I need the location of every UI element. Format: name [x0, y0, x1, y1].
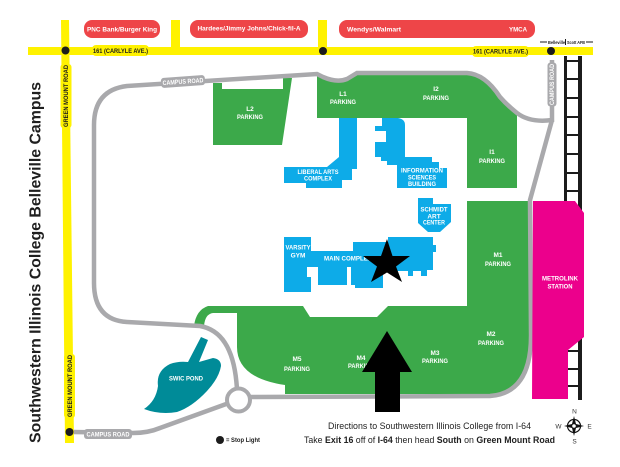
building: Main Complex and Varsity Gym: VARSITY — [286, 244, 311, 252]
business pills — [84, 20, 535, 38]
building: Schmidt Art Center: CENTER — [423, 220, 445, 226]
building: Main Complex and Varsity Gym — [284, 237, 436, 292]
legend: stop light — [216, 436, 260, 444]
icon: star marking location — [363, 239, 410, 282]
label: Carlyle east: 161 (CARLYLE AVE.) — [473, 48, 528, 56]
label: M5: M5 — [292, 356, 302, 363]
label: M1 — [485, 252, 511, 268]
street: Carlyle Ave — [28, 47, 593, 55]
label: L2: PARKING — [237, 114, 263, 121]
label: M3 — [422, 350, 448, 365]
direction marker: Belleville / Scott AFB — [540, 39, 593, 45]
street: Green Mount Road — [61, 20, 74, 443]
road labels — [60, 45, 556, 439]
direction marker: Belleville / Scott AFB: Belleville — [548, 40, 565, 45]
street: connector west — [171, 20, 180, 48]
stop lights — [62, 46, 555, 436]
SWIC pond: SWIC POND — [169, 376, 203, 382]
SWIC pond — [144, 337, 221, 413]
label: I2: I2 — [433, 86, 439, 93]
label: M4 — [348, 355, 374, 370]
campus road — [73, 60, 552, 433]
parking labels — [237, 86, 511, 373]
icon: compass rose: N — [572, 408, 577, 416]
pill: Wendys, Walmart, YMCA: YMCA — [509, 26, 527, 34]
parking: L1, I2, I1 — [317, 73, 517, 188]
pill: Wendys, Walmart, YMCA: Wendys/Walmart — [347, 26, 402, 34]
label: I1: PARKING — [479, 158, 505, 165]
label: L2: L2 — [246, 106, 254, 113]
label: M5: PARKING — [284, 366, 310, 373]
label: M4: M4 — [356, 355, 366, 362]
icon: compass rose — [555, 408, 592, 446]
directions text — [304, 421, 555, 446]
label: Campus Road top — [161, 75, 205, 88]
label: I2: PARKING — [423, 95, 449, 102]
buildings — [284, 118, 451, 292]
pill: Wendys, Walmart, YMCA — [339, 20, 535, 38]
label: I2 — [423, 86, 449, 102]
label: M3: PARKING — [422, 358, 448, 365]
label: Campus Road east — [548, 62, 556, 106]
icon: compass rose: E — [587, 424, 592, 430]
label: L2 — [237, 106, 263, 121]
direction marker: Belleville / Scott AFB: Scott AFB — [567, 40, 586, 45]
metrolink station: METROLINK — [542, 276, 578, 282]
building: Liberal Arts Complex: COMPLEX — [304, 176, 333, 182]
title: Southwestern Illinois College Belleville Campus — [28, 82, 44, 443]
label: Green Mount Road south — [64, 354, 75, 418]
label: M5 — [284, 356, 310, 373]
label: M1: PARKING — [485, 261, 511, 268]
icon: compass rose: W — [555, 424, 562, 430]
label: M4: PARKING — [348, 363, 374, 370]
label: Green Mount Road north: GREEN MOUNT ROAD — [63, 65, 70, 127]
label: Campus Road top: CAMPUS ROAD — [162, 77, 204, 87]
label: Carlyle west — [92, 45, 149, 56]
building: Schmidt Art Center — [418, 198, 451, 232]
legend: stop light: = Stop Light — [226, 438, 260, 444]
label: M2: PARKING — [478, 340, 504, 347]
building: Information Sciences Building: BUILDING — [408, 181, 436, 188]
building: Information Sciences Building: SCIENCES — [408, 174, 437, 182]
label: L1 — [330, 91, 356, 106]
label: Green Mount Road south: GREEN MOUNT ROAD — [67, 355, 74, 417]
label: Green Mount Road north — [60, 64, 72, 128]
label: M2: M2 — [486, 331, 496, 338]
label: Campus Road southwest: CAMPUS ROAD — [86, 432, 130, 438]
metrolink station — [532, 201, 584, 399]
building: Liberal Arts Complex: LIBERAL ARTS — [298, 169, 339, 176]
pill: PNC Bank / Burger King — [84, 20, 160, 38]
icon: compass rose: S — [572, 438, 577, 446]
building: Liberal Arts Complex — [284, 118, 357, 188]
pill: Hardees — [190, 20, 308, 38]
building: Main Complex and Varsity Gym: GYM — [291, 252, 305, 260]
parking: M1 to M5 — [194, 201, 529, 394]
building: Main Complex and Varsity Gym: MAIN COMPLEX — [324, 256, 373, 262]
label: I1: I1 — [489, 149, 495, 156]
road: south and east loop — [249, 120, 552, 397]
label: L1: PARKING — [330, 99, 356, 106]
label: M3: M3 — [430, 350, 440, 357]
label: L1: L1 — [339, 91, 347, 98]
building: Schmidt Art Center: SCHMIDT — [420, 206, 448, 214]
label: Carlyle east — [472, 46, 529, 57]
roundabout — [227, 388, 250, 412]
building: Information Sciences Building — [375, 118, 447, 188]
parking: L2 — [213, 78, 292, 145]
directions text: Directions to Southwestern Illinois College from I-64 — [328, 421, 531, 432]
pill: Hardees: Hardees/Jimmy Johns/Chick-fil-A — [198, 26, 301, 32]
directions text: Take Exit 16 off of I-64 then head South on Green Mount Road — [304, 435, 555, 446]
building: Information Sciences Building: INFORMATION — [401, 168, 443, 174]
building: Schmidt Art Center: ART — [427, 214, 441, 220]
label: M1: M1 — [493, 252, 503, 259]
metrolink station: STATION — [548, 284, 573, 290]
road: southwest link — [73, 403, 229, 433]
label: Campus Road east: CAMPUS ROAD — [549, 64, 556, 105]
label: M2 — [478, 331, 504, 347]
parking lots — [194, 73, 529, 394]
arrow: entrance from the south — [362, 331, 412, 412]
pill: PNC Bank / Burger King: PNC Bank/Burger King — [87, 26, 157, 34]
road: north and west loop — [94, 60, 552, 390]
label: Carlyle west: 161 (CARLYLE AVE.) — [93, 48, 148, 55]
label: Campus Road southwest — [84, 429, 132, 439]
railroad tracks — [564, 56, 582, 400]
label: I1 — [479, 149, 505, 165]
street: connector east — [318, 20, 327, 48]
